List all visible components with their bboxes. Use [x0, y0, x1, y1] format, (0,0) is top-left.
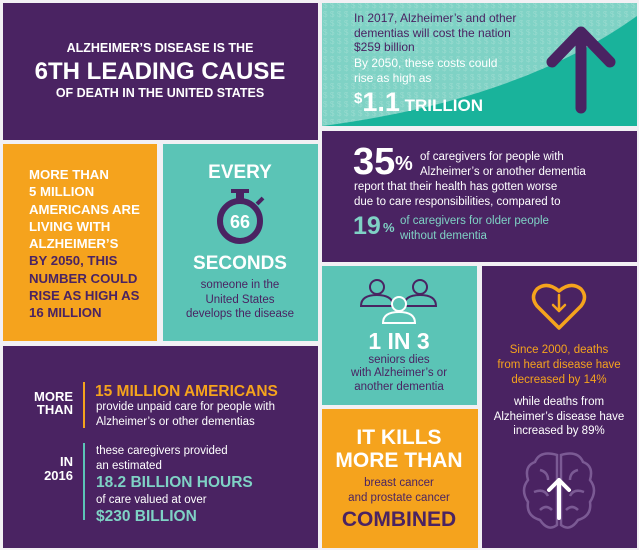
text: cancers: breast cancer	[364, 477, 434, 489]
text: heart disease	[497, 344, 621, 386]
text: heart disease: Since 2000, deaths	[510, 344, 608, 356]
text: cost: dementias will cost the nation	[354, 26, 511, 40]
stat: 35%: report that their health has gotten worse	[354, 181, 557, 193]
panel: title	[3, 3, 318, 140]
label: more than: MORE	[34, 389, 73, 404]
panel: caregiver health	[322, 131, 637, 262]
text: cost: In 2017, Alzheimer’s and other	[354, 11, 516, 25]
label: in 2016	[44, 454, 73, 483]
stat: 35%: 35	[353, 141, 395, 183]
text: 5 million: 5 MILLION	[29, 184, 94, 199]
panel: cost	[322, 3, 637, 126]
text: heart disease: from heart disease have	[497, 359, 621, 371]
panel: 5 million	[3, 144, 157, 341]
stat: 19%: %	[383, 220, 395, 235]
icon: brain with up arrow	[524, 454, 594, 528]
text: 18.2 billion hours: these caregivers provided	[96, 445, 228, 457]
heading: every: EVERY	[208, 162, 272, 183]
panel: unpaid care	[3, 346, 318, 548]
panel: kills more	[322, 409, 478, 548]
text: seniors: seniors dies	[368, 354, 430, 366]
heading: 1 in 3: 1 IN 3	[368, 328, 430, 354]
text: alzheimer's increase: Alzheimer’s disease have	[494, 411, 624, 423]
stat: 35%: due to care responsibilities, compared to	[354, 196, 560, 208]
text: 15 million: 15 MILLION AMERICANS	[95, 383, 278, 400]
label: more than: THAN	[37, 402, 73, 417]
text: seniors	[350, 354, 447, 393]
stat: 35%: %	[395, 153, 413, 175]
text: develops disease	[186, 279, 294, 320]
text: cost: $259 billion	[354, 40, 415, 54]
text: 18.2 billion hours: of care valued at over	[96, 494, 207, 506]
icon: stopwatch: 66	[230, 212, 250, 232]
icon: up arrow	[552, 32, 610, 108]
text: 5 million: AMERICANS ARE	[29, 202, 140, 217]
text: develops disease: United States	[205, 294, 275, 306]
text: cost: $	[354, 90, 363, 107]
icon: stopwatch	[220, 189, 263, 241]
text: 5 million: 16 MILLION	[29, 305, 102, 320]
label: in 2016: IN	[60, 454, 73, 469]
text: 5 million: BY 2050, THIS	[29, 253, 118, 268]
label: in 2016: 2016	[44, 468, 73, 483]
heading: title	[35, 41, 285, 100]
stat: 19%: without dementia	[399, 230, 488, 242]
stat: 19%: 19	[353, 212, 381, 240]
stat: 19%	[353, 212, 549, 242]
text: 5 million: NUMBER COULD	[29, 271, 137, 286]
panel: 1 in 3	[322, 266, 477, 405]
heading: it kills more than: IT KILLS	[356, 426, 442, 449]
icon: people	[361, 280, 436, 323]
text: develops disease: someone in the	[201, 279, 279, 291]
text: cancers	[348, 477, 450, 504]
text: alzheimer's increase	[494, 396, 624, 437]
text: heart disease: decreased by 14%	[511, 374, 607, 386]
heading: seconds: SECONDS	[193, 253, 287, 274]
text: alzheimer's increase: while deaths from	[513, 396, 604, 408]
stat: 35%	[353, 141, 586, 208]
text: cost: rise as high as	[354, 71, 431, 85]
label: more than	[34, 389, 73, 417]
heading: title: OF DEATH IN THE UNITED STATES	[56, 86, 264, 100]
text: 18.2 billion hours: 18.2 BILLION HOURS	[96, 474, 253, 491]
text: 5 million	[29, 167, 140, 320]
text: develops disease: develops the disease	[186, 308, 294, 320]
heading: combined: COMBINED	[342, 508, 456, 531]
heading: it kills more than	[335, 426, 463, 472]
panel: every 66 seconds	[163, 144, 318, 341]
text: alzheimer's increase: increased by 89%	[513, 425, 605, 437]
stat: 35%: Alzheimer’s or another dementia	[420, 166, 586, 178]
text: cost: 1.1	[362, 87, 400, 117]
text: 15 million: Alzheimer’s or other dementias	[96, 416, 255, 428]
text: seniors: another dementia	[354, 381, 444, 393]
text: 5 million: RISE AS HIGH AS	[29, 288, 140, 303]
text: 15 million	[95, 383, 278, 428]
text: 5 million: LIVING WITH	[29, 219, 110, 234]
text: cost: TRILLION	[400, 96, 483, 115]
heading: title: 6TH LEADING CAUSE	[35, 58, 285, 85]
text: cost: By 2050, these costs could	[354, 56, 497, 70]
text: 18.2 billion hours	[96, 445, 253, 525]
stat: 19%: of caregivers for older people	[400, 215, 549, 227]
text: 5 million: MORE THAN	[29, 167, 109, 182]
text: 18.2 billion hours: $230 BILLION	[96, 508, 197, 525]
text: cost	[354, 11, 516, 117]
text: 5 million: ALZHEIMER’S	[29, 236, 119, 251]
text: cancers: and prostate cancer	[348, 492, 450, 504]
stat: 35%: of caregivers for people with	[420, 151, 564, 163]
text: 18.2 billion hours: an estimated	[96, 460, 162, 472]
heading: it kills more than: MORE THAN	[335, 449, 463, 472]
text: 15 million: provide unpaid care for people with	[96, 401, 275, 413]
panel: heart disease vs alzheimer's	[482, 266, 637, 548]
text: seniors: with Alzheimer’s or	[350, 367, 447, 379]
icon: heart down	[534, 285, 584, 328]
heading: title: ALZHEIMER’S DISEASE IS THE	[67, 41, 253, 55]
